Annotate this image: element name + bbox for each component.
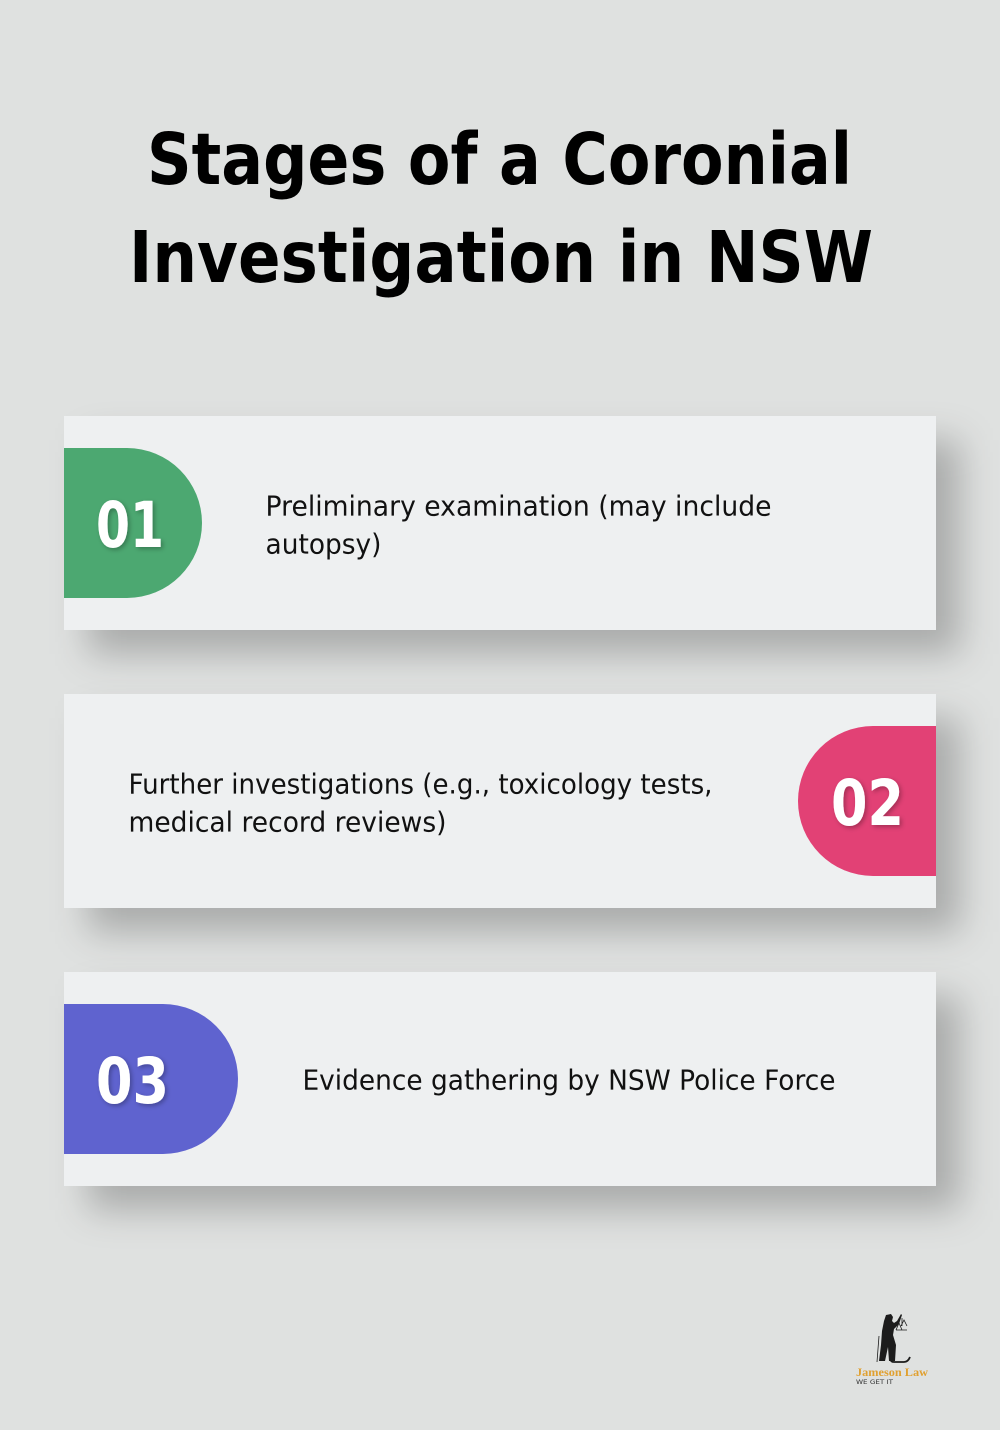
- panel: stage 01: [64, 416, 960, 654]
- title: Investigation in NSW: [129, 216, 873, 299]
- logo tagline: WE GET IT: [856, 1378, 893, 1386]
- text: stage 02 description: medical record reviews): [128, 806, 446, 838]
- badge: 01: [64, 448, 202, 598]
- logo: Jameson Law: [856, 1314, 929, 1386]
- text: stage 02 description: Further investigations (e.g., toxicology tests,: [128, 768, 712, 800]
- badge: 02: 02: [831, 767, 904, 840]
- logo wordmark: Jameson Law: [856, 1367, 929, 1379]
- badge: 02: [798, 726, 936, 876]
- icon: lady justice: [877, 1314, 910, 1362]
- text: stage 03 description: Evidence gathering by NSW Police Force: [302, 1064, 836, 1096]
- badge: 01: 01: [96, 489, 164, 562]
- badge: 03: 03: [96, 1045, 169, 1118]
- panel: stage 02: [64, 694, 960, 932]
- text: stage 02 description: [128, 768, 712, 838]
- badge: 03: [64, 1004, 238, 1154]
- panel: stage 03: [64, 972, 960, 1210]
- text: stage 01 description: autopsy): [266, 528, 382, 560]
- text: stage 01 description: [266, 490, 772, 560]
- text: stage 01 description: Preliminary examination (may include: [266, 490, 772, 522]
- title: Stages of a Coronial: [147, 118, 852, 201]
- title: [129, 118, 873, 299]
